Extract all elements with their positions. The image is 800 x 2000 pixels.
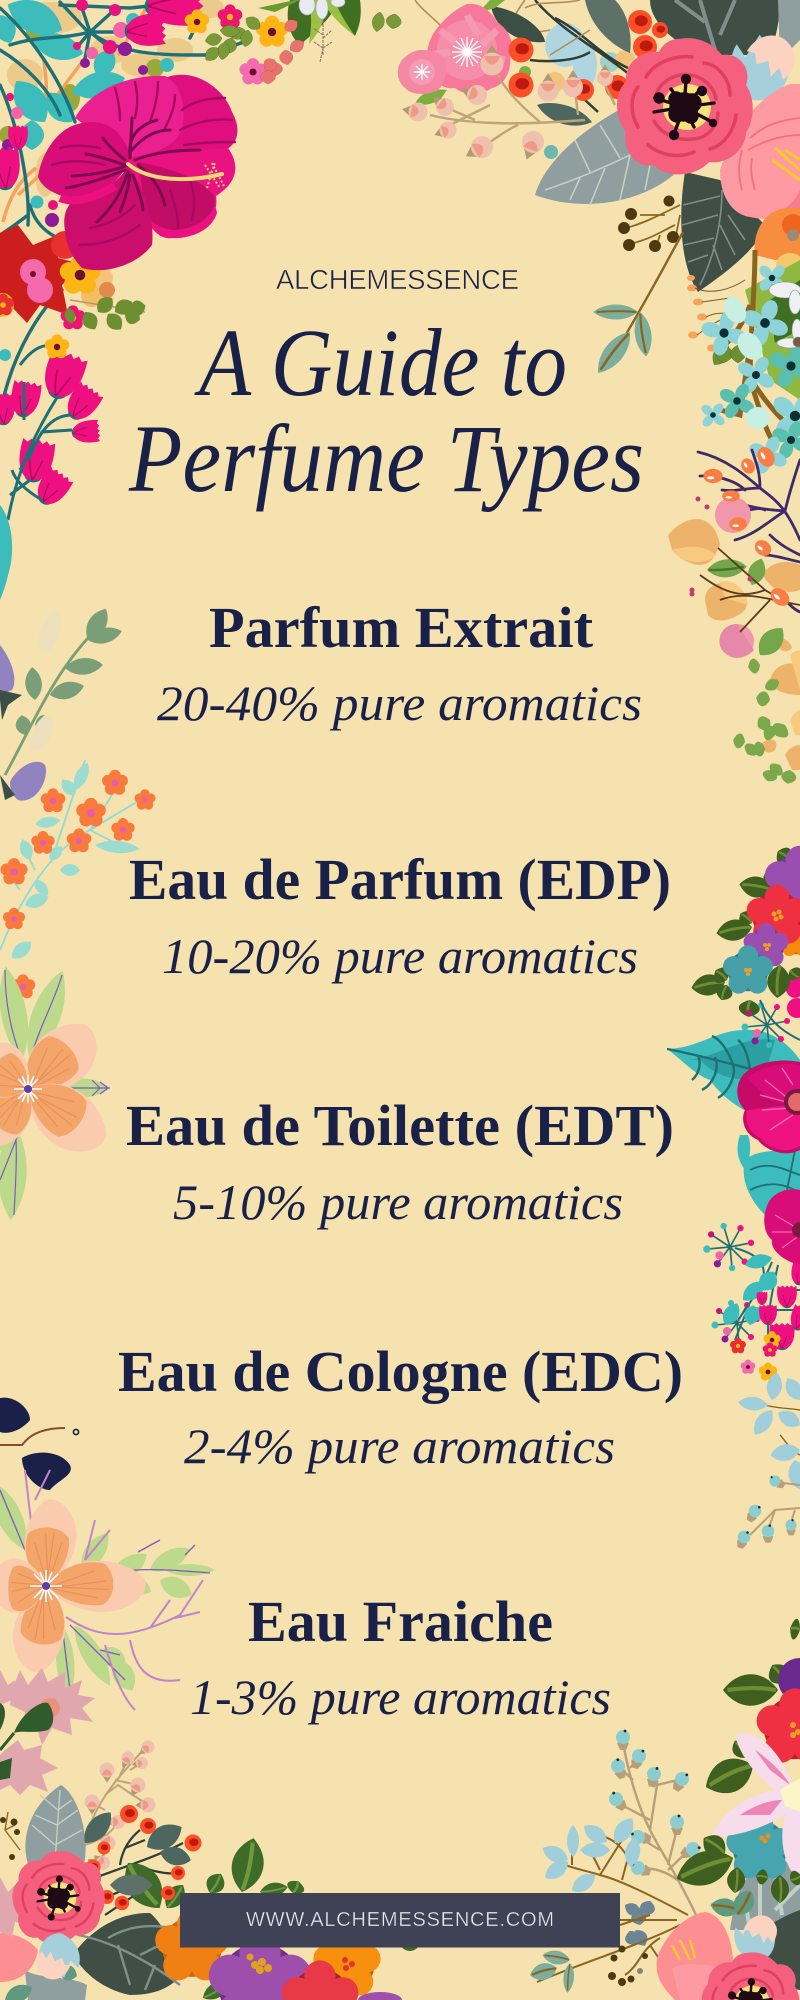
floral cluster: left middle <box>0 604 155 1220</box>
light blue branch <box>539 1814 688 1915</box>
section: Eau de Cologne <box>118 1339 683 1474</box>
grey leaves <box>730 1860 800 1935</box>
sage leaves <box>491 0 631 126</box>
grey lower leaves <box>25 1970 87 2000</box>
dark and light green leaves <box>258 0 361 45</box>
icon: berry sprays <box>703 1002 790 1346</box>
dark green leaves <box>690 844 800 1018</box>
purple leaf veins <box>0 970 110 1215</box>
icon: pink flowers <box>61 4 267 329</box>
section: Eau de Toilette <box>126 1093 674 1230</box>
brown twigs <box>700 548 800 632</box>
purple flower <box>209 1932 311 2000</box>
icon: yellow flowers <box>45 9 288 358</box>
orange stamens on teal flower <box>760 1834 770 1844</box>
lavender-blue leaves <box>622 1898 657 1949</box>
light blue bud <box>723 27 800 108</box>
tan background blossoms <box>7 0 224 197</box>
footer bar <box>180 1893 620 1948</box>
grey-green leaves <box>78 1806 193 1896</box>
icon: lower magenta tulips <box>757 1261 800 1350</box>
purple flower <box>778 1658 800 1702</box>
icon: red berries <box>86 1805 202 1910</box>
light blue sprig <box>738 1371 800 1491</box>
concentration: 20-40% pure aromatics <box>157 675 642 731</box>
pink dots <box>690 496 752 596</box>
pink buds <box>715 497 754 658</box>
bottom center flowers <box>155 1909 402 2000</box>
floral cluster: lower right <box>528 1618 800 2000</box>
concentration: 2-4% pure aromatics <box>184 1418 615 1474</box>
light blue bud <box>36 1932 81 1980</box>
turquoise leaves <box>0 0 128 150</box>
upper magenta petals <box>785 972 800 1018</box>
hibiscus petal streaks <box>52 82 235 245</box>
salmon leaflets <box>260 16 307 84</box>
brown stems <box>720 250 795 445</box>
yellow-orange flower <box>313 1930 381 1995</box>
sage leaves <box>2 1963 79 2000</box>
section: Eau de Parfum <box>129 847 671 984</box>
salmon flower <box>720 84 800 221</box>
icon: red berries <box>508 10 668 101</box>
concentration: 10-20% pure aromatics <box>162 928 638 984</box>
grey leaf <box>25 1785 86 1870</box>
teal berry branch <box>606 1730 703 1917</box>
green sprig <box>63 293 147 334</box>
thistle left of rose <box>0 1877 33 1937</box>
turquoise strip <box>0 505 12 600</box>
green thistle buds <box>0 1703 53 1780</box>
teal bud near grey leaf <box>544 145 558 159</box>
tan branch <box>85 1745 148 1860</box>
magenta flower <box>737 1061 800 1153</box>
section: Eau Fraiche: Eau Fraiche <box>248 1589 553 1654</box>
floral cluster: right upper <box>668 250 800 785</box>
icon: dried brown sprig <box>618 196 680 252</box>
salmon flower <box>0 1933 38 1982</box>
turquoise leaf <box>667 1030 800 1118</box>
mint leaves <box>8 760 140 963</box>
peach tulip flowers <box>668 519 800 770</box>
pale grey seed clusters <box>25 608 66 755</box>
light grey veins <box>745 1865 800 1930</box>
pink thistle flowers <box>0 1668 95 1795</box>
light blue bud <box>734 1915 777 1962</box>
green fern leaves <box>0 1477 215 1700</box>
floral cluster: right middle <box>667 844 800 1550</box>
purple flowers <box>0 645 46 801</box>
brown branches <box>537 1915 680 1982</box>
purple berry twig <box>313 20 332 62</box>
red flower <box>747 885 800 944</box>
green leaves <box>415 0 531 105</box>
teal berry sprig <box>734 1473 800 1550</box>
section: Eau de Parfum: Eau de Parfum (EDP) <box>129 847 671 912</box>
orange flower <box>155 1909 229 1980</box>
main rose <box>617 38 753 174</box>
turquoise sprigs <box>719 1000 800 1345</box>
small purple flower <box>744 923 788 966</box>
section: Parfum Extrait: Parfum Extrait <box>209 595 594 660</box>
icon: pale buds <box>84 1738 157 1873</box>
mint stems <box>0 760 140 950</box>
floral garland: top center <box>202 0 402 84</box>
lower turquoise leaf <box>738 1135 800 1218</box>
red flower <box>0 225 85 323</box>
floral cluster: lower left <box>0 1398 420 2000</box>
pink coral branches <box>25 1470 203 1710</box>
small navy ring <box>73 1429 79 1435</box>
navy flowers <box>0 1398 71 1490</box>
small green sprigs <box>732 658 797 785</box>
teal flower <box>726 1813 794 1878</box>
brown twigs <box>415 0 590 55</box>
icon: magenta tulips <box>0 0 204 511</box>
section: Eau de Toilette: Eau de Toilette (EDT) <box>126 1093 674 1158</box>
hibiscus stamen <box>128 164 222 179</box>
salmon flower <box>657 1912 740 2000</box>
icon: pale pink buds <box>400 44 613 166</box>
green backing <box>745 260 800 400</box>
red flower <box>282 1960 358 2000</box>
green leaf tips <box>699 1618 800 1802</box>
white daisies <box>769 282 800 348</box>
dark leaf <box>681 172 766 292</box>
icon: orange buds <box>703 444 793 610</box>
title <box>128 309 644 512</box>
icon: orange small flowers <box>0 770 155 998</box>
section: Parfum Extrait <box>157 595 642 731</box>
small flowers <box>730 1331 781 1380</box>
orange flower <box>778 922 800 956</box>
light blue petals <box>545 23 620 89</box>
title second line: Perfume Types <box>128 405 644 512</box>
section: Eau Fraiche <box>190 1589 611 1725</box>
small purple <box>358 1992 402 2000</box>
dark twigs <box>530 0 630 112</box>
sage sprig <box>5 604 124 775</box>
purple branches <box>698 450 800 612</box>
small rose <box>12 1851 105 1944</box>
red flower <box>757 1688 800 1763</box>
peach blossom <box>81 268 115 307</box>
second magenta flower <box>764 1189 800 1265</box>
dark leaf <box>766 1910 800 1990</box>
mint petals <box>719 293 770 429</box>
green leaves behind pale flower <box>0 964 110 1220</box>
lily <box>712 1733 800 1880</box>
thin seed stems <box>695 280 745 335</box>
lower teal stems <box>8 345 72 520</box>
teal flower <box>723 945 773 994</box>
olive leaflets <box>708 341 746 369</box>
bottom rose <box>702 1952 800 2000</box>
olive accents <box>0 21 164 144</box>
dark top leaf <box>650 0 779 55</box>
title: A Guide to <box>194 309 567 416</box>
purple fern veins <box>0 1490 210 1690</box>
floral cluster: top right <box>398 0 800 379</box>
concentration: 5-10% pure aromatics <box>173 1174 623 1230</box>
icon: dried sprig <box>608 1946 648 1986</box>
purple flower <box>765 846 800 914</box>
concentration: 1-3% pure aromatics <box>190 1669 611 1725</box>
pale orange flower <box>0 1009 119 1166</box>
dark twigs <box>97 1830 183 1915</box>
orange flower <box>754 208 800 277</box>
green leaves <box>671 1829 800 1903</box>
icon: dried sprig <box>0 1812 20 1860</box>
sage sprig <box>590 232 683 379</box>
pale grey corner leaf <box>778 0 800 60</box>
green leaves <box>114 1835 420 2000</box>
teal stems <box>0 2 250 400</box>
dark leaf <box>73 1913 187 1995</box>
sage leaves <box>528 1948 575 1993</box>
section: Eau de Cologne: Eau de Cologne (EDC) <box>118 1339 683 1404</box>
leaves <box>706 556 791 662</box>
website text: WWW.ALCHEMESSENCE.COM <box>246 1909 554 1931</box>
white flower <box>299 0 345 19</box>
orange twigs <box>3 5 148 222</box>
peach accents <box>545 50 635 92</box>
floral cluster: top left <box>0 0 288 600</box>
icon: teal flowers <box>693 255 800 482</box>
brand name: ALCHEMESSENCE <box>276 264 519 295</box>
orange seed tips <box>687 275 717 352</box>
pink flowers <box>398 4 512 94</box>
colored berries <box>0 0 174 361</box>
grey leaf <box>535 100 681 205</box>
teal-green leaves <box>709 1886 759 1920</box>
hibiscus flower <box>38 75 237 270</box>
pale orange flower <box>0 1497 146 1675</box>
tan branches <box>430 70 615 148</box>
olive leaflets <box>202 11 402 64</box>
